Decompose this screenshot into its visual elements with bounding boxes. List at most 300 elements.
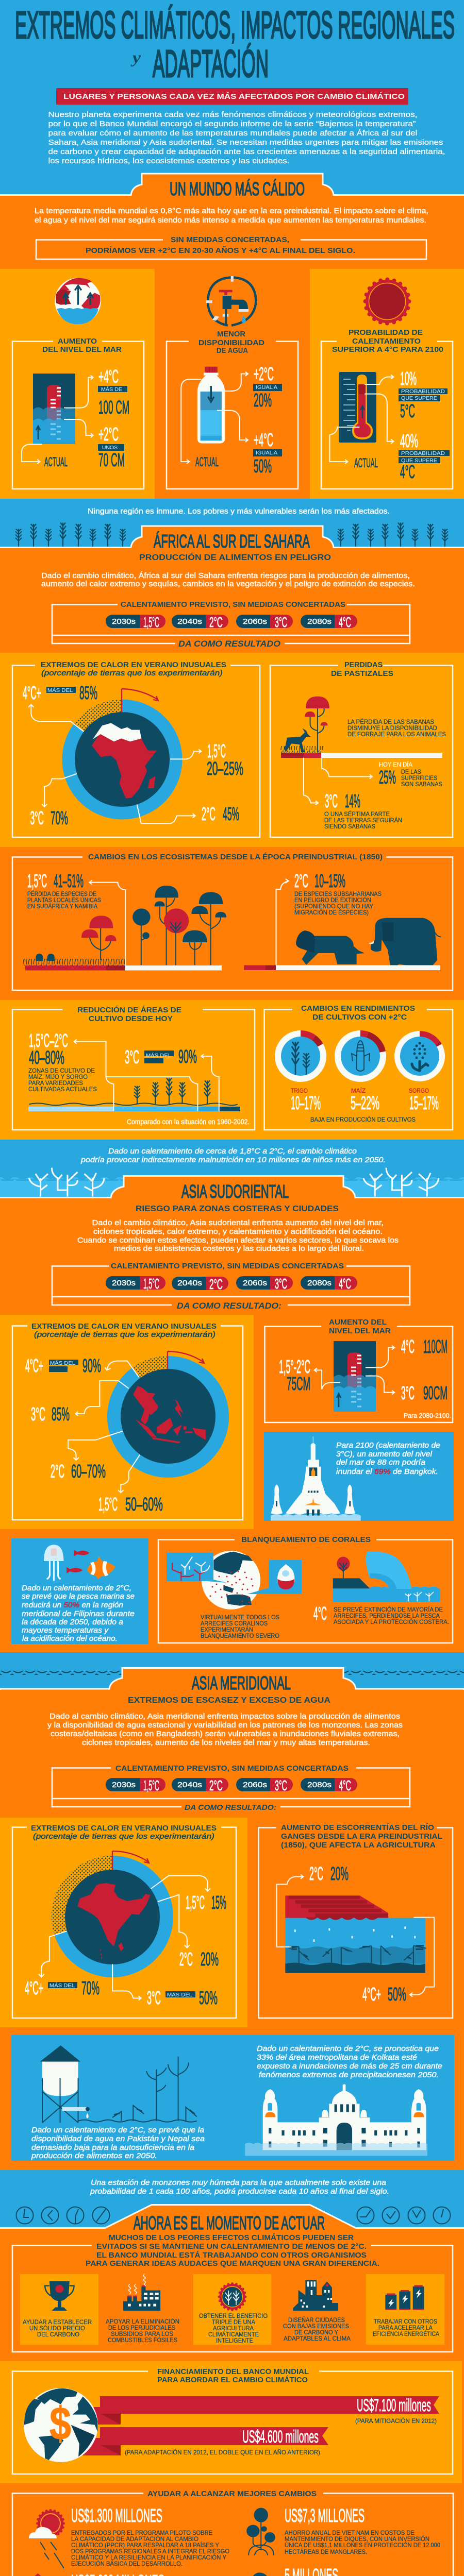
stat: 3°C [125, 1046, 197, 1067]
heading [329, 1318, 391, 1335]
title [15, 4, 455, 85]
frame [12, 2494, 453, 2576]
text blocks: savanna: 25% [379, 767, 396, 788]
stat labels: africa: 1,5°C [207, 740, 226, 761]
panel: probabilidad de calentamiento [321, 279, 453, 489]
projected warming: asia meridional: 2040s [177, 1781, 202, 1789]
panel: aumento del nivel del mar [12, 278, 144, 489]
item: viet nam: AHORRO ANUAL DE VIET NAM EN COSTOS DE [285, 2529, 415, 2536]
chart: crop area bar [28, 1078, 240, 1111]
card: precio del carbono [20, 2274, 98, 2345]
heading: (1850), QUE AFECTA LA AGRICULTURA [281, 1841, 436, 1850]
arrows: probability leaders [329, 375, 393, 464]
arrows: ganges leaders [277, 1875, 434, 1997]
stat: +2°C: +2°C [98, 423, 119, 445]
text: extinction: ASOCIADA Y LA PROTECCIÓN COSTERA. [334, 1618, 449, 1625]
card: subsidios: DE LOS PERJUDICIALES [108, 2324, 175, 2331]
intro paragraph: Sahara, Asia meridional y Asia sudoriental. Se necesitan medidas urgentes para mitigar las emisiones [48, 138, 443, 147]
title: ADAPTACIÓN [153, 42, 269, 85]
inset: bleached polyp [247, 1560, 302, 1594]
stat labels: africa: MÁS DEL [47, 687, 73, 693]
heading: (porcentaje de tierras que los experimentarán) [41, 669, 223, 677]
text: Para 2100 (calentamiento de [336, 1441, 440, 1450]
donut chart: southeast asia [107, 1351, 229, 1478]
stats: sea level: Para 2080-2100. [404, 1412, 451, 1419]
text: bleaching [201, 1614, 279, 1639]
text: malnutrition note: podría provocar indirectamente malnutrición en 10 millones de niños más en 2050. [80, 1156, 386, 1164]
text: Dado un calentamiento de 2°C, [22, 1584, 131, 1592]
frame [12, 2371, 453, 2474]
text: la década de 2050, debido a [22, 1618, 123, 1626]
subtitle banner [56, 88, 408, 105]
projected warming: asia sudoriental: 3°C [275, 1276, 287, 1292]
text: malnutrition note: Dado un calentamiento de cerca de 1,8°C a 2°C, el cambio climático [108, 1147, 357, 1156]
stats: ganges: 20% [330, 1863, 349, 1884]
text: kolkata: Dado un calentamiento de 2°C, se pronostica que [257, 2044, 439, 2053]
text block: africa intro: Dado el cambio climático, África al sur del Sahara enfrenta riesgos para la producción de alimentos, [41, 571, 410, 580]
stat: +4°C [253, 429, 282, 477]
projected warming: africa [52, 600, 410, 649]
stat: plants: 41–51% [54, 870, 84, 891]
section tab: asia sudoriental [0, 1176, 464, 1202]
item: viet nam: HECTÁREAS DE MANGLARES. [285, 2548, 367, 2555]
item: ppcr: DOS PROGRAMAS REGIONALES A INTEGRAR EL RIESGO [71, 2548, 229, 2555]
item: ppcr: CLIMÁTICO (PPCR) PARA RESPALDAR A 18 PAÍSES Y [71, 2541, 219, 2549]
text: pakistan nepal: producción de alimentos en 2050. [31, 2151, 157, 2160]
stat labels: africa: 20–25% [207, 758, 243, 779]
projected warming: asia meridional: CALENTAMIENTO PREVISTO, SIN MEDIDAS CONCERTADAS [115, 1764, 349, 1773]
donut chart: south asia [52, 1851, 173, 1977]
ribbons back [82, 2407, 121, 2455]
heading: PARA GENERAR IDEAS AUDACES QUE MARQUEN UNA GRAN DIFERENCIA. [86, 2259, 379, 2268]
stat labels: africa: 70% [51, 807, 68, 828]
text blocks: savanna [324, 718, 446, 830]
text block: warming intro: el agua y el nivel del mar seguirá siendo más intenso a medida que aumenten las temperaturas mundiales. [35, 216, 426, 225]
stats: crops: SORGO [409, 1087, 429, 1094]
text blocks: savanna: HOY EN DÍA [379, 760, 412, 768]
stat labels: south asia: 4°C+ [25, 1977, 43, 1998]
callout: sin medidas concertadas: PODRÍAMOS VER +2°C EN 20-30 AÑOS Y +4°C AL FINAL DEL SIGLO. [86, 246, 355, 255]
section tab: áfrica al sur del sahara: ÁFRICA AL SUR DEL SAHARA [154, 531, 310, 552]
stat: +4°C: +4°C [98, 366, 119, 387]
text: extinction: ARRECIFES, PERDIÉNDOSE LA PESCA [334, 1612, 440, 1619]
text block: asia sudoriental intro: ciclones tropicales, calor extremo, y calentamiento y acidificación del océano. [93, 1227, 383, 1236]
text block: asia sudoriental intro [77, 1218, 399, 1253]
projected warming: asia sudoriental: 4°C [339, 1276, 351, 1292]
panel: reducción de áreas de cultivo: 90% [178, 1046, 197, 1067]
heading: MENOR [217, 330, 245, 338]
stat labels: south asia: 50% [199, 1987, 218, 2008]
heading: EXTREMOS DE CALOR EN VERANO INUSUALES [31, 1322, 217, 1331]
text block: asia sudoriental intro: Cuando se combinan estos efectos, pueden afectar a varios sectores, lo que socava los [77, 1236, 399, 1245]
card: agricultura [193, 2274, 271, 2345]
frame [12, 666, 260, 837]
panel: aumento del nivel del mar: 70 CM [98, 449, 125, 470]
stat: species: (SUPONIENDO QUE NO HAY [294, 903, 373, 910]
section tab: un mundo más cálido: UN MUNDO MÁS CÁLIDO [170, 178, 305, 199]
stat labels: southeast asia: 85% [52, 1403, 70, 1425]
heading: FINANCIAMIENTO DEL BANCO MUNDIAL [157, 2367, 309, 2376]
card: eficiencia energética: PARA ACELERAR LA [378, 2324, 433, 2331]
ribbon: adaptación [100, 2427, 328, 2456]
arrows: africa leaders [28, 704, 201, 823]
item: viet nam: US$7,3 MILLONES [285, 2505, 364, 2526]
card: agricultura: CLIMÁTICAMENTE [208, 2330, 259, 2338]
stats: ganges [309, 1863, 406, 2005]
heading: DE CULTIVOS CON +2°C [312, 1013, 407, 1022]
text: malnutrition note [80, 1147, 386, 1164]
arrows: sea level leaders [22, 376, 93, 464]
stats: sea level: 4°C [401, 1336, 415, 1357]
card: ciudades: DE CARBONO Y [294, 2329, 338, 2336]
projected warming: asia sudoriental: 2030s [112, 1279, 136, 1287]
projected warming: asia meridional: 3°C [275, 1777, 287, 1793]
stat: +4°C: 50% [254, 455, 272, 477]
panel: financiamiento del banco mundial [12, 2367, 453, 2474]
chart: sea level gauge [334, 1341, 376, 1412]
heading: AUMENTO [58, 337, 97, 346]
heading: DEL NIVEL DEL MAR [42, 345, 122, 354]
card: precio del carbono: UN SÓLIDO PRECIO [29, 2324, 85, 2332]
stat: 1,5–2: 40–80% [29, 1047, 64, 1068]
text: pakistan nepal: disponibilidad de agua en Pakistán y Nepal sea [31, 2134, 205, 2143]
text blocks: savanna: DE LAS [401, 768, 421, 775]
text blocks: savanna: 3°C [325, 790, 338, 811]
text block: asia sudoriental intro: medios de subsistencia costeros y las ciudades a lo largo del litoral. [114, 1244, 364, 1253]
stat labels: southeast asia: 2°C [51, 1461, 64, 1482]
section tab: un mundo más cálido [0, 174, 464, 199]
item: ppcr: ENTREGADOS POR EL PROGRAMA PILOTO SOBRE [71, 2529, 212, 2536]
text block: asia meridional intro: ciclones tropicales, aumento de los niveles del mar y muy altas temperaturas. [82, 1738, 370, 1747]
text: pakistan nepal [31, 2126, 205, 2160]
section tab: ahora es el momento de actuar: AHORA ES EL MOMENTO DE ACTUAR [134, 2212, 325, 2233]
panel: probabilidad de calentamiento: ACTUAL [354, 456, 378, 470]
text: 3°C), un aumento del nivel [336, 1450, 433, 1459]
stat: plants: PÉRDIDA DE ESPECIES DE [27, 890, 96, 897]
panel: kolkata and pakistan [11, 2035, 454, 2161]
stats: crops: 10–17% [291, 1092, 321, 1113]
heading [41, 660, 226, 677]
stat labels: africa: 3°C [30, 807, 44, 828]
text: kolkata [257, 2044, 442, 2079]
text blocks: savanna: DE LAS TIERRAS SEGUIRÁN [324, 816, 402, 824]
projected warming: africa: CALENTAMIENTO PREVISTO, SIN MEDIDAS CONCERTADAS [121, 600, 345, 609]
stat labels: south asia [25, 1892, 226, 2008]
heading: CAMBIOS EN RENDIMIENTOS [301, 1004, 415, 1013]
heading: CALENTAMIENTO [352, 337, 421, 346]
stats: crops: BAJA EN PRODUCCIÓN DE CULTIVOS [310, 1115, 416, 1123]
heading [281, 1823, 442, 1850]
arrows: south asia leaders [39, 1876, 210, 2000]
heading: NIVEL DEL MAR [329, 1327, 391, 1335]
stats: crops [291, 1087, 439, 1123]
ribbon: adaptación: US$4.600 millones [242, 2427, 319, 2447]
text block: warming intro [35, 207, 428, 225]
text blocks: savanna: DISMINUYE LA DISPONIBILIDAD [347, 724, 437, 732]
stat: species: MIGRACIÓN DE ESPECIES) [294, 908, 369, 916]
stat: 1,5–2: CULTIVADAS ACTUALES [28, 1086, 97, 1093]
intro paragraph: de carbono y crear capacidad de adaptación ante las crecientes amenazas a la seguridad alimentaria, [48, 147, 445, 156]
frame [270, 666, 453, 837]
stat: +2°C: +2°C [254, 363, 274, 384]
stat: species [294, 870, 382, 916]
panel: reducción de áreas de cultivo [12, 1005, 255, 1130]
panel: pérdidas de pastizales [270, 660, 453, 837]
stat: 3°C: MÁS DEL [146, 1052, 171, 1059]
section tab: ahora es el momento de actuar [0, 2205, 464, 2233]
stat: +4°C: IGUAL A [256, 450, 277, 456]
text: reducirá un 50% en la región [22, 1601, 123, 1609]
donut chart: africa [62, 689, 183, 819]
illustration: lion and elephant [296, 918, 441, 968]
stat: 10%: QUE SUPERE [401, 395, 437, 401]
heading [86, 2233, 379, 2268]
stat: species: EN PELIGRO DE EXTINCIÓN [294, 896, 371, 904]
illustration: temple [271, 1436, 361, 1521]
projected warming: asia sudoriental: 2080s [307, 1279, 332, 1287]
item: ppcr: CLIMÁTICO Y LA RESILIENCIA EN LA PLANIFICACIÓN Y [71, 2553, 226, 2561]
stat: plants: PLANTAS LOCALES ÚNICAS [27, 896, 101, 904]
icon: globe with dollar: $ [49, 2398, 71, 2450]
panel: escorrentías del ganges: 50% [388, 1984, 406, 2005]
heading [77, 1005, 181, 1023]
card: ciudades [283, 2280, 351, 2342]
bar: savanna area [281, 753, 442, 758]
panel: blanqueamiento de corales [158, 1535, 453, 1643]
stat: 10%: 10% [400, 368, 417, 389]
item: viet nam [246, 2505, 440, 2555]
card: ciudades: CON BAJAS EMISIONES [283, 2323, 349, 2330]
subtitle banner: LUGARES Y PERSONAS CADA VEZ MÁS AFECTADOS POR CAMBIO CLIMÁTICO [63, 92, 405, 101]
frame [12, 1827, 236, 2018]
illustration: water tower and dry crops [40, 2045, 197, 2123]
text block: asia meridional intro: y la disponibilidad de agua estacional y variabilidad en los patrones de los monzones. Las zonas [47, 1721, 403, 1730]
card: subsidios: COMBUSTIBLES FÓSILES [108, 2336, 177, 2344]
callout: sin medidas concertadas [36, 235, 426, 259]
stats: sea level: 3°C [401, 1382, 415, 1403]
panel: escorrentías del ganges [259, 1823, 453, 2018]
stat: 10% [399, 368, 448, 421]
illustration: trees and plants [36, 886, 226, 965]
arrows: savanna leaders [304, 758, 372, 805]
text block: africa intro [41, 571, 415, 588]
subheading: RIESGO PARA ZONAS COSTERAS Y CIUDADES [136, 1205, 339, 1213]
stat labels: africa: 2°C [202, 803, 216, 824]
text block: warming intro: La temperatura media mundial es 0,8°C más alta hoy que en la era preindustrial. El impacto sobre el clima, [35, 207, 428, 215]
stat: 1,5–2: 1,5°C–2°C [29, 1030, 68, 1051]
card: agricultura: AGRICULTURA [213, 2325, 254, 2332]
text: extinction [313, 1603, 449, 1625]
projected warming: asia sudoriental: 2040s [177, 1279, 202, 1287]
card: ciudades: DISEÑAR CIUDADES [288, 2316, 345, 2324]
projected warming: asia meridional: 2080s [307, 1781, 332, 1789]
frame [12, 1010, 255, 1130]
panel: aumento del nivel del mar asia [265, 1318, 453, 1422]
bar: species extinction [244, 965, 440, 970]
heading: PARA ABORDAR EL CAMBIO CLIMÁTICO [157, 2376, 308, 2384]
frame [12, 857, 453, 990]
panel: extremos de calor asia sudoriental [12, 1322, 243, 1520]
arrows: water leaders [181, 372, 248, 464]
card: eficiencia energética [366, 2274, 444, 2345]
intro paragraph: para evaluar cómo el aumento de las temperaturas mundiales puede afectar a África al sur del [48, 129, 418, 138]
text: pakistan nepal: demasiado baja para la autosuficiencia en la [31, 2143, 194, 2152]
stat: +4°C [98, 366, 129, 418]
section tab: asia sudoriental: ASIA SUDORIENTAL [181, 1181, 289, 1202]
stats: ganges: 2°C [309, 1863, 323, 1884]
card: agricultura: OBTENER EL BENEFICIO [199, 2312, 268, 2319]
heading [198, 330, 264, 355]
projected warming: asia sudoriental: 2060s [243, 1279, 267, 1287]
stat labels: africa: 45% [223, 803, 239, 824]
heading: (porcentaje de tierras que los experimentarán) [34, 1330, 216, 1339]
stat labels: southeast asia: 3°C [31, 1403, 45, 1425]
card: eficiencia energética: EFICIENCIA ENERGÉTICA [373, 2330, 439, 2337]
heading [157, 2367, 309, 2384]
heading: SUPERIOR A 4°C PARA 2100 [332, 345, 443, 354]
stat: 3°C: 3°C [125, 1046, 139, 1067]
item: viet nam: MANTENIMIENTO DE DIQUES, CON UNA INVERSIÓN [285, 2535, 429, 2543]
text blocks: savanna: O UNA SÉPTIMA PARTE [324, 810, 390, 818]
stat: +2°C: UNOS [102, 445, 118, 451]
stat: +4°C: MÁS DE [101, 386, 122, 393]
text: extinction: SE PREVÉ EXTINCIÓN DE MAYORÍA DE [334, 1605, 443, 1613]
panel: menor disponibilidad de agua [167, 276, 298, 489]
projected warming: asia sudoriental [52, 1262, 410, 1311]
heading [332, 328, 443, 354]
text: ninguna región es inmune: Ninguna región es inmune. Los pobres y más vulnerables serán los más afectados. [88, 507, 390, 516]
heading: EXTREMOS DE CALOR EN VERANO INUSUALES [31, 1824, 217, 1833]
heading [31, 1322, 217, 1339]
item: ppcr: EJECUCIÓN BÁSICA DEL DESARROLLO. [71, 2560, 183, 2567]
stat: species: 10–15% [314, 870, 345, 891]
text block: asia meridional intro [47, 1712, 403, 1747]
icons: corals [29, 1168, 439, 1197]
card: agricultura: TRIPLE DE UNA [212, 2318, 255, 2326]
stat labels: africa [23, 682, 243, 828]
text: la acidificación del océano. [22, 1634, 118, 1643]
icon: faucet ring [206, 276, 256, 326]
panel: aumento del nivel del mar: ACTUAL [44, 455, 68, 469]
projected warming: africa: DA COMO RESULTADO [178, 639, 280, 649]
stat labels: southeast asia: 90% [82, 1355, 101, 1376]
icon: sun badge [365, 279, 409, 324]
projected warming: africa: 2080s [307, 617, 332, 626]
icons: wheat row [15, 522, 448, 547]
card: subsidios [106, 2274, 179, 2344]
text: bleaching: BLANQUEAMIENTO SEVERO [201, 1632, 279, 1639]
illustration: kolkata palace [245, 2084, 427, 2156]
heading: DISPONIBILIDAD [198, 338, 264, 347]
item: ppcr [29, 2505, 229, 2568]
card: agricultura: INTELIGENTE [216, 2337, 253, 2344]
stat labels: southeast asia: 50–60% [125, 1494, 163, 1515]
text [336, 1441, 440, 1476]
chart: water bottle [197, 367, 225, 444]
grass [279, 746, 323, 753]
intro paragraph: Nuestro planeta experimenta cada vez más fenómenos climáticos y meteorológicos extremos, [48, 110, 418, 119]
arrows: sea level leaders [314, 1346, 394, 1395]
stat: +2°C: 20% [254, 389, 272, 411]
stats: sea level: 75CM [287, 1373, 310, 1394]
stat: +2°C [253, 363, 282, 411]
text block: africa intro: aumento del calor extremo y sequías, cambios en la vegetación y el peligro de extinción de especies. [41, 580, 415, 588]
stat: 1,5–2: ZONAS DE CULTIVO DE [28, 1067, 95, 1074]
frame [158, 1539, 453, 1643]
stats: sea level [279, 1336, 451, 1419]
text: monzones: probabilidad de 1 cada 100 años, podrá producirse cada 10 años al final del siglo. [90, 2187, 389, 2196]
stat labels: south asia: 20% [201, 1948, 219, 1970]
projected warming: asia meridional: 2030s [112, 1781, 136, 1789]
projected warming: asia meridional: 2060s [243, 1781, 267, 1789]
projected warming: asia meridional: 2°C [209, 1777, 223, 1793]
heading: DE AGUA [217, 346, 248, 355]
stats: sea level: 1,5°-2°C [279, 1356, 310, 1377]
note: Comparado con la situación en 1960-2002. [127, 1117, 250, 1126]
card: subsidios: SUBSIDIOS PARA LOS [111, 2330, 173, 2337]
heading: AUMENTO DEL [329, 1318, 387, 1327]
icon: sea level globe [55, 278, 101, 324]
heading: PERDIDAS [344, 660, 383, 669]
icon: savanna tree and antelope [284, 697, 329, 752]
panel: menor disponibilidad de agua: ACTUAL [195, 455, 219, 469]
projected warming: africa: 3°C [275, 614, 287, 630]
text blocks: savanna: DE FORRAJE PARA LOS ANIMALES [347, 731, 446, 738]
decoration row: waves [0, 1671, 464, 1675]
heading: MUCHOS DE LOS PEORES EFECTOS CLIMÁTICOS PUEDEN SER [109, 2233, 354, 2242]
panel: bangkok [264, 1432, 454, 1521]
card: precio del carbono: DEL CARBONO [37, 2331, 79, 2338]
ribbon: mitigación [100, 2396, 439, 2425]
subheading: PRODUCCIÓN DE ALIMENTOS EN PELIGRO [139, 552, 331, 562]
text: kolkata: 33% del área metropolitana de Kolkata esté [257, 2053, 417, 2062]
inset: corals [167, 1553, 227, 1583]
stat: 40% [399, 430, 450, 482]
item: ppcr: LA CAPACIDAD DE ADAPTACIÓN AL CAMBIO [71, 2535, 198, 2543]
stat: 40%: 4°C [400, 461, 415, 482]
stat: 10%: 5°C [400, 400, 415, 421]
projected warming: africa: 2°C [209, 614, 223, 630]
grass [23, 959, 126, 965]
stat labels: southeast asia: 1,5°C [98, 1494, 118, 1515]
text blocks: savanna: SUPERFICIES [401, 774, 437, 782]
arrows: crop leaders [74, 1040, 219, 1111]
heading: PROBABILIDAD DE [349, 328, 423, 337]
intro paragraph: por lo que el Banco Mundial encargó el segundo informe de la serie “Bajemos la temperatura” [48, 120, 416, 128]
text: inundar el 69% de Bangkok. [336, 1467, 438, 1476]
stat: 1,5–2: PARA VARIEDADES [28, 1079, 83, 1087]
heading [331, 660, 393, 678]
callout: sin medidas concertadas: SIN MEDIDAS CONCERTADAS, [171, 235, 289, 244]
projected warming: africa: 2060s [243, 617, 267, 626]
stat labels: africa: 85% [79, 682, 97, 703]
stat labels: africa: 4°C+ [23, 682, 41, 703]
panel: extremos de calor áfrica [12, 660, 260, 837]
stat labels: southeast asia: MÁS DEL [50, 1360, 75, 1366]
arrows: southeast asia leaders [68, 1361, 140, 1493]
heading: EXTREMOS DE CALOR EN VERANO INUSUALES [41, 660, 226, 669]
panel: ideas audaces [12, 2233, 453, 2352]
text: del mar de 88 cm podría [336, 1458, 425, 1467]
subheading: EXTREMOS DE ESCASEZ Y EXCESO DE AGUA [128, 1696, 330, 1705]
frame [12, 1326, 243, 1520]
stat: 1,5–2: MAÍZ, MIJO Y SORGO [28, 1073, 88, 1080]
stat: 10%: PROBABILIDAD [401, 388, 445, 395]
heading: AYUDAR A ALCANZAR MEJORES CAMBIOS [147, 2489, 317, 2498]
text blocks: savanna: LA PÉRDIDA DE LAS SABANAS [347, 718, 434, 725]
heading [301, 1004, 415, 1022]
projected warming: africa: 2040s [177, 617, 202, 626]
